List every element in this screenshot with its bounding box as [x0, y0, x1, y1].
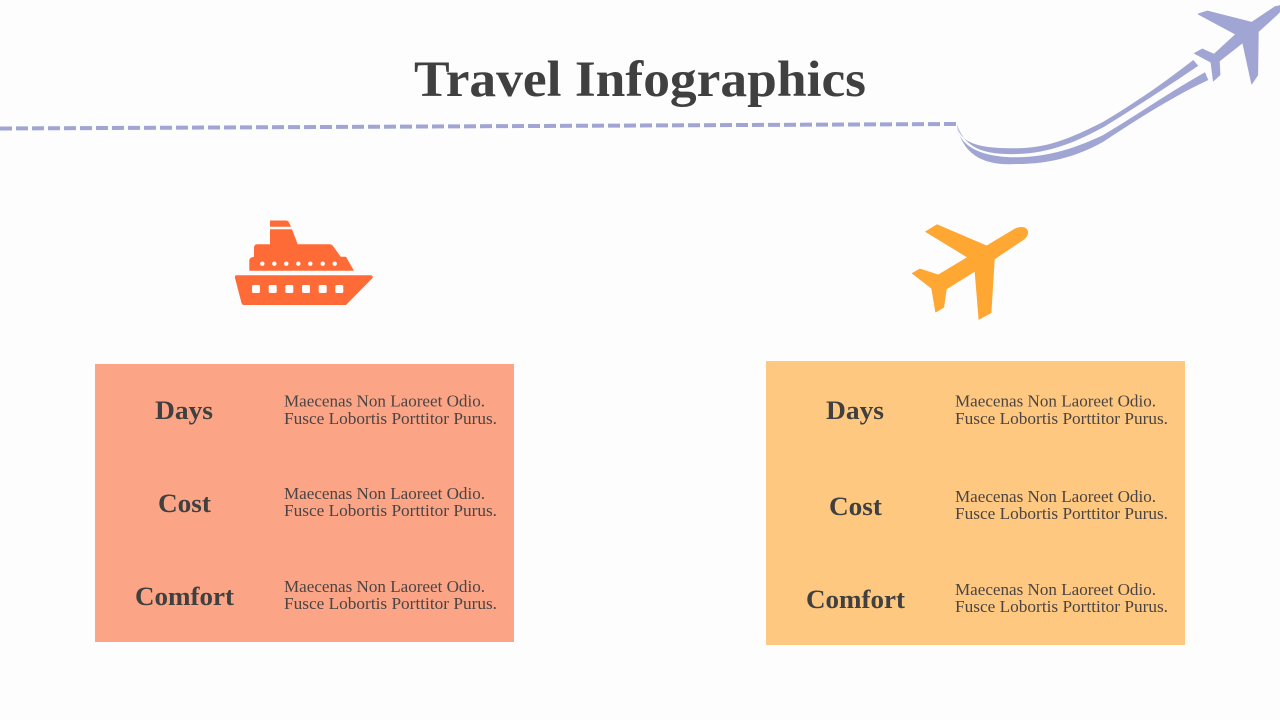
row: comfort: Comfort: [806, 584, 905, 614]
row: days: [155, 392, 497, 428]
row: cost: [158, 484, 497, 520]
row: cost: Maecenas Non Laoreet Odio.: [284, 484, 485, 503]
row: days: Fusce Lobortis Porttitor Purus.: [955, 409, 1168, 428]
row: comfort: [806, 580, 1168, 616]
row: cost: Cost: [829, 491, 882, 521]
row: cost: Fusce Lobortis Porttitor Purus.: [955, 504, 1168, 523]
row: comfort: Fusce Lobortis Porttitor Purus.: [284, 594, 497, 613]
row: days: Days: [826, 395, 884, 425]
row: cost: Cost: [158, 488, 211, 518]
row: days: Maecenas Non Laoreet Odio.: [955, 392, 1156, 411]
row: days: Maecenas Non Laoreet Odio.: [284, 392, 485, 411]
row: comfort: Fusce Lobortis Porttitor Purus.: [955, 597, 1168, 616]
row: comfort: Comfort: [135, 581, 234, 611]
dashed flight path: [0, 124, 957, 128]
icon: cruise ship: [235, 220, 373, 305]
icon: airplane: [912, 225, 1028, 319]
row: comfort: [135, 577, 497, 613]
row: days: Fusce Lobortis Porttitor Purus.: [284, 409, 497, 428]
row: comfort: Maecenas Non Laoreet Odio.: [955, 580, 1156, 599]
title: Travel Infographics: [414, 52, 866, 108]
panel: ship details: [95, 364, 514, 642]
row: cost: [829, 487, 1168, 523]
row: cost: Maecenas Non Laoreet Odio.: [955, 487, 1156, 506]
panel: plane details: [766, 361, 1185, 645]
row: days: Days: [155, 395, 213, 425]
row: days: [826, 392, 1168, 428]
row: cost: Fusce Lobortis Porttitor Purus.: [284, 501, 497, 520]
row: comfort: Maecenas Non Laoreet Odio.: [284, 577, 485, 596]
icon: airplane with contrails: [957, 6, 1280, 164]
